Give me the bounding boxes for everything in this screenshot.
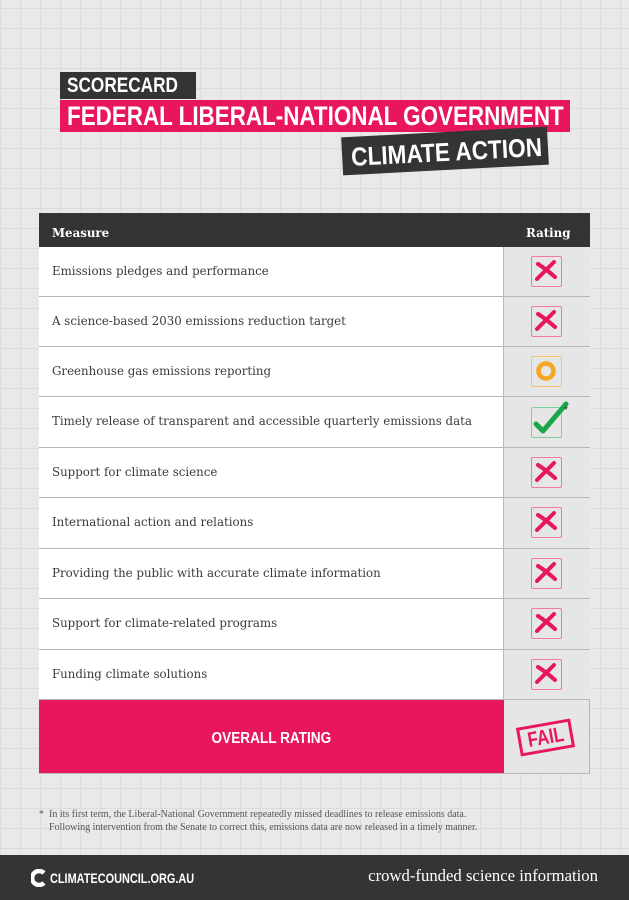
row: emissions pledges: Emissions pledges and performance: [52, 264, 269, 278]
row: 2030 target: A science-based 2030 emissions reduction target: [52, 314, 346, 328]
overall rating row: [39, 700, 590, 774]
title block: [60, 72, 570, 176]
heading: climate action: CLIMATE ACTION: [350, 132, 543, 172]
row: funding: [39, 650, 590, 700]
row: 2030 target: [39, 297, 590, 347]
overall rating label: OVERALL RATING: [212, 730, 331, 747]
row: programs: [39, 599, 590, 650]
row: quarterly data: Timely release of transparent and accessible quarterly emissions data: [52, 414, 472, 428]
footnote: Following intervention from the Senate to correct this, emissions data are now released in a timely manner.: [49, 822, 477, 833]
table header: [39, 213, 590, 248]
tagline: crowd-funded science information: [368, 866, 598, 885]
heading: federal government: FEDERAL LIBERAL-NATIONAL GOVERNMENT: [67, 101, 564, 131]
row: climate science: [39, 448, 590, 498]
row: quarterly data: *: [564, 405, 568, 416]
overall rating label: [39, 700, 504, 773]
table header: Measure: [52, 226, 109, 240]
heading: scorecard: [60, 72, 196, 99]
heading: scorecard: SCORECARD: [67, 74, 178, 97]
row: GHG reporting: [39, 347, 590, 397]
row: climate science: Support for climate science: [52, 465, 217, 479]
row: emissions pledges: [39, 247, 590, 297]
row: funding: Funding climate solutions: [52, 667, 207, 681]
footer bar: [0, 855, 629, 900]
scorecard table: [39, 213, 590, 774]
row: quarterly data: [39, 397, 590, 448]
logo: CLIMATECOUNCIL.ORG.AU: [50, 870, 194, 886]
row: public information: [39, 549, 590, 599]
row: international: International action and relations: [52, 515, 253, 529]
footnote: *: [39, 809, 44, 820]
row: GHG reporting: Greenhouse gas emissions reporting: [52, 364, 271, 378]
row: programs: Support for climate-related programs: [52, 616, 277, 630]
stamp: fail: FAIL: [526, 723, 565, 752]
row: public information: Providing the public with accurate climate information: [52, 566, 381, 580]
stamp: fail: [516, 718, 575, 757]
footnote: [39, 809, 477, 833]
row: international: [39, 498, 590, 549]
footnote: In its first term, the Liberal-National Government repeatedly missed deadlines to release emissions data.: [49, 809, 466, 820]
table header: Rating: [526, 226, 570, 240]
